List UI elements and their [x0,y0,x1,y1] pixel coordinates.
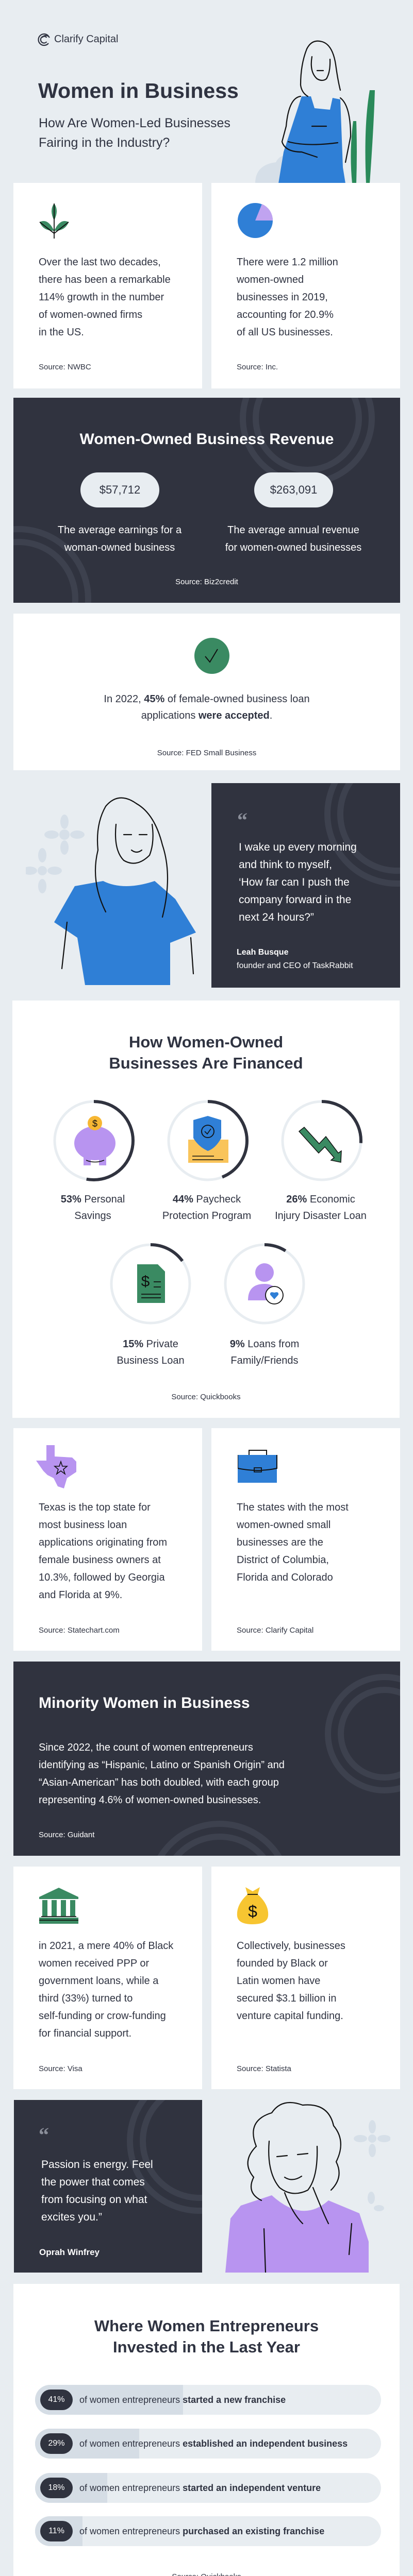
quote text: from focusing on what [41,2194,147,2206]
heading: Where Women Entrepreneurs [94,2317,319,2335]
panel: loans accepted [13,614,400,770]
ring: 44% [167,1100,249,1181]
attribution [237,948,353,970]
text: growth stat: 114% growth in the number [39,292,164,303]
text: secured $3.1 billion in [237,1993,336,2004]
panel: how financed [12,1001,400,1418]
quote text [239,841,357,923]
quote text [41,2159,153,2223]
label: 15%: 15% Private [123,1338,178,1350]
text: states: businesses are the [237,1537,323,1548]
pill: 263091 [254,472,333,507]
text: states: Florida and Colorado [237,1572,333,1583]
quote mark: “ [237,808,247,832]
label: 44%: 44% Paycheck [173,1194,241,1205]
text: self-funding or crow-funding [39,2010,166,2022]
quote text: the power that comes [41,2176,145,2188]
icon: pie chart [238,203,273,238]
label: 26%: 26% Economic [286,1194,355,1205]
source: Source: NWBC [39,363,91,371]
heading [109,1033,303,1072]
text: texas [39,1502,167,1601]
label: 9%: 9% Loans from [230,1338,299,1350]
source: Source: Quickbooks [171,1393,241,1401]
quote text: ‘How far can I push the [239,876,350,888]
text: earnings: The average earnings for a [58,524,181,536]
bar: 18%: 18% [48,2483,65,2492]
label: 44% [162,1194,251,1222]
text: share stat: women-owned [237,274,304,285]
pill: 263091: $263,091 [270,483,317,496]
quote text: excites you.” [41,2211,102,2223]
icon: texas [36,1445,76,1488]
text: revenue: for women-owned businesses [225,542,361,553]
panel: states card [211,1428,400,1651]
panel: Black women card [13,1867,202,2089]
bar: 29%: of women entrepreneurs established an independent business [79,2438,348,2449]
text: share stat: accounting for 20.9% [237,309,334,320]
label: 53%: Savings [74,1210,111,1222]
quote text: next 24 hours?” [239,911,314,923]
quote mark: “ [39,2123,49,2146]
bar: 41%: of women entrepreneurs started a new franchise [79,2395,286,2405]
text: earnings [58,524,181,553]
text: revenue [225,524,361,553]
text: third (33%) turned to [39,1993,133,2004]
bar: 41%: 41% [48,2395,65,2404]
subtitle: How Are Women-Led Businesses [39,116,230,130]
text: government loans, while a [39,1975,158,1987]
panel: share card [211,183,400,388]
text: texas: and Florida at 9%. [39,1589,122,1601]
text: growth stat: Over the last two decades, [39,257,161,268]
text: “Asian-American” has both doubled, with each group [39,1777,279,1788]
text: share stat: There were 1.2 million [237,257,338,268]
heading: Minority Women in Business [39,1694,250,1711]
bar: 29%: 29% [48,2439,65,2448]
label: 15% [117,1338,185,1366]
label: 53%: 53% Personal [61,1194,125,1205]
attribution: Oprah Winfrey [39,2247,100,2257]
quote text: I wake up every morning [239,841,357,853]
text: share stat: businesses in 2019, [237,292,328,303]
ring: 15%: $ [141,1273,150,1290]
text: texas: female business owners at [39,1554,161,1566]
ring: 26% [282,1100,362,1181]
icon: bank [39,1888,78,1924]
icon: money bag: $ [248,1902,257,1921]
source: Source: Guidant [39,1831,94,1839]
ring: 53%: $ [92,1118,97,1129]
label: 15%: Business Loan [117,1355,185,1366]
text [237,1940,345,2022]
pill: 57712 [80,472,159,507]
heading: Businesses Are Financed [109,1054,303,1072]
icon: briefcase [238,1450,277,1483]
ring: 9% [224,1243,305,1324]
text: founded by Black or [237,1958,328,1969]
text: venture capital funding. [237,2010,343,2022]
panel: quote Leah Busque [211,783,400,988]
text [39,1940,173,2039]
text: growth stat: there has been a remarkable [39,274,171,285]
text: texas: Texas is the top state for [39,1502,151,1513]
source: Source: Inc. [237,363,278,371]
bar: 41% [35,2385,381,2415]
text: share stat: of all US businesses. [237,327,333,338]
label: 44%: Protection Program [162,1210,251,1222]
illustration: Oprah [225,2102,390,2273]
attribution: Leah Busque [237,948,288,957]
source: Source: Clarify Capital [237,1626,313,1635]
icon: money bag [237,1887,268,1924]
text: growth stat [39,257,171,338]
quote text: and think to myself, [239,859,332,871]
text: Latin women have [237,1975,320,1987]
text: in 2021, a mere 40% of Black [39,1940,173,1952]
text: states: The states with the most [237,1502,349,1513]
text: 45% [104,693,310,721]
text: 45%: applications were accepted. [141,710,272,721]
text: growth stat: in the US. [39,327,84,338]
source: Source: Biz2credit [175,578,238,586]
text: texas: applications originating from [39,1537,167,1548]
title: Women in Business [38,79,239,103]
icon: sprout [39,204,69,239]
source: Source: Statista [237,2064,291,2073]
label: 9% [230,1338,299,1366]
heading: Invested in the Last Year [113,2338,300,2356]
text: growth stat: of women-owned firms [39,309,142,320]
panel: VC card [211,1867,400,2089]
text: earnings: woman-owned business [64,542,175,553]
ring: 53% [54,1100,135,1181]
text: texas: 10.3%, followed by Georgia [39,1572,165,1583]
text [39,1742,285,1806]
label: 53% [61,1194,125,1222]
subtitle [39,116,230,150]
text: 45%: In 2022, 45% of female-owned business loan [104,693,310,705]
attribution: founder and CEO of TaskRabbit [237,961,353,970]
panel: quote Oprah [14,2100,202,2273]
heading: Women-Owned Business Revenue [80,431,334,448]
icon: check [194,638,229,674]
text: states [237,1502,349,1583]
bar: 29% [35,2429,381,2459]
label: 26% [275,1194,367,1222]
panel: growth card [13,183,202,388]
bar: 11% [35,2516,381,2546]
text: states: District of Columbia, [237,1554,329,1566]
bar: 18% [35,2473,381,2503]
heading: How Women-Owned [129,1033,283,1051]
panel: Texas card [13,1428,202,1651]
illustration: woman with apron [255,40,375,183]
text: revenue: The average annual revenue [227,524,359,536]
logo: header: Clarify Capital [54,33,118,45]
text: texas: most business loan [39,1519,127,1531]
text: Collectively, businesses [237,1940,345,1952]
text: women received PPP or [39,1958,149,1969]
label: 9%: Family/Friends [230,1355,299,1366]
subtitle: Fairing in the Industry? [39,135,170,150]
text: states: women-owned small [237,1519,331,1531]
bar: 11%: of women entrepreneurs purchased an existing franchise [79,2526,324,2536]
text: identifying as “Hispanic, Latino or Spanish Origin” and [39,1759,285,1771]
illustration: Leah Busque [26,798,196,985]
heading [94,2317,319,2356]
quote text: company forward in the [239,894,351,906]
panel: where invested [13,2284,400,2576]
text: Since 2022, the count of women entrepreneurs [39,1742,253,1753]
text: for financial support. [39,2028,131,2039]
bar: 11%: 11% [48,2527,64,2535]
source: Source: Visa [39,2064,82,2073]
ring: 15% [110,1243,191,1324]
quote text: Passion is energy. Feel [41,2159,153,2171]
bar: 18%: of women entrepreneurs started an independent venture [79,2483,321,2493]
source: Source: Statechart.com [39,1626,120,1635]
source: Source: FED Small Business [157,749,256,757]
label: 26%: Injury Disaster Loan [275,1210,367,1222]
text: share stat [237,257,338,338]
pill: 57712: $57,712 [100,483,140,496]
text: representing 4.6% of women-owned businesses. [39,1794,261,1806]
panel: revenue [13,398,400,603]
panel: minority women [13,1662,400,1856]
